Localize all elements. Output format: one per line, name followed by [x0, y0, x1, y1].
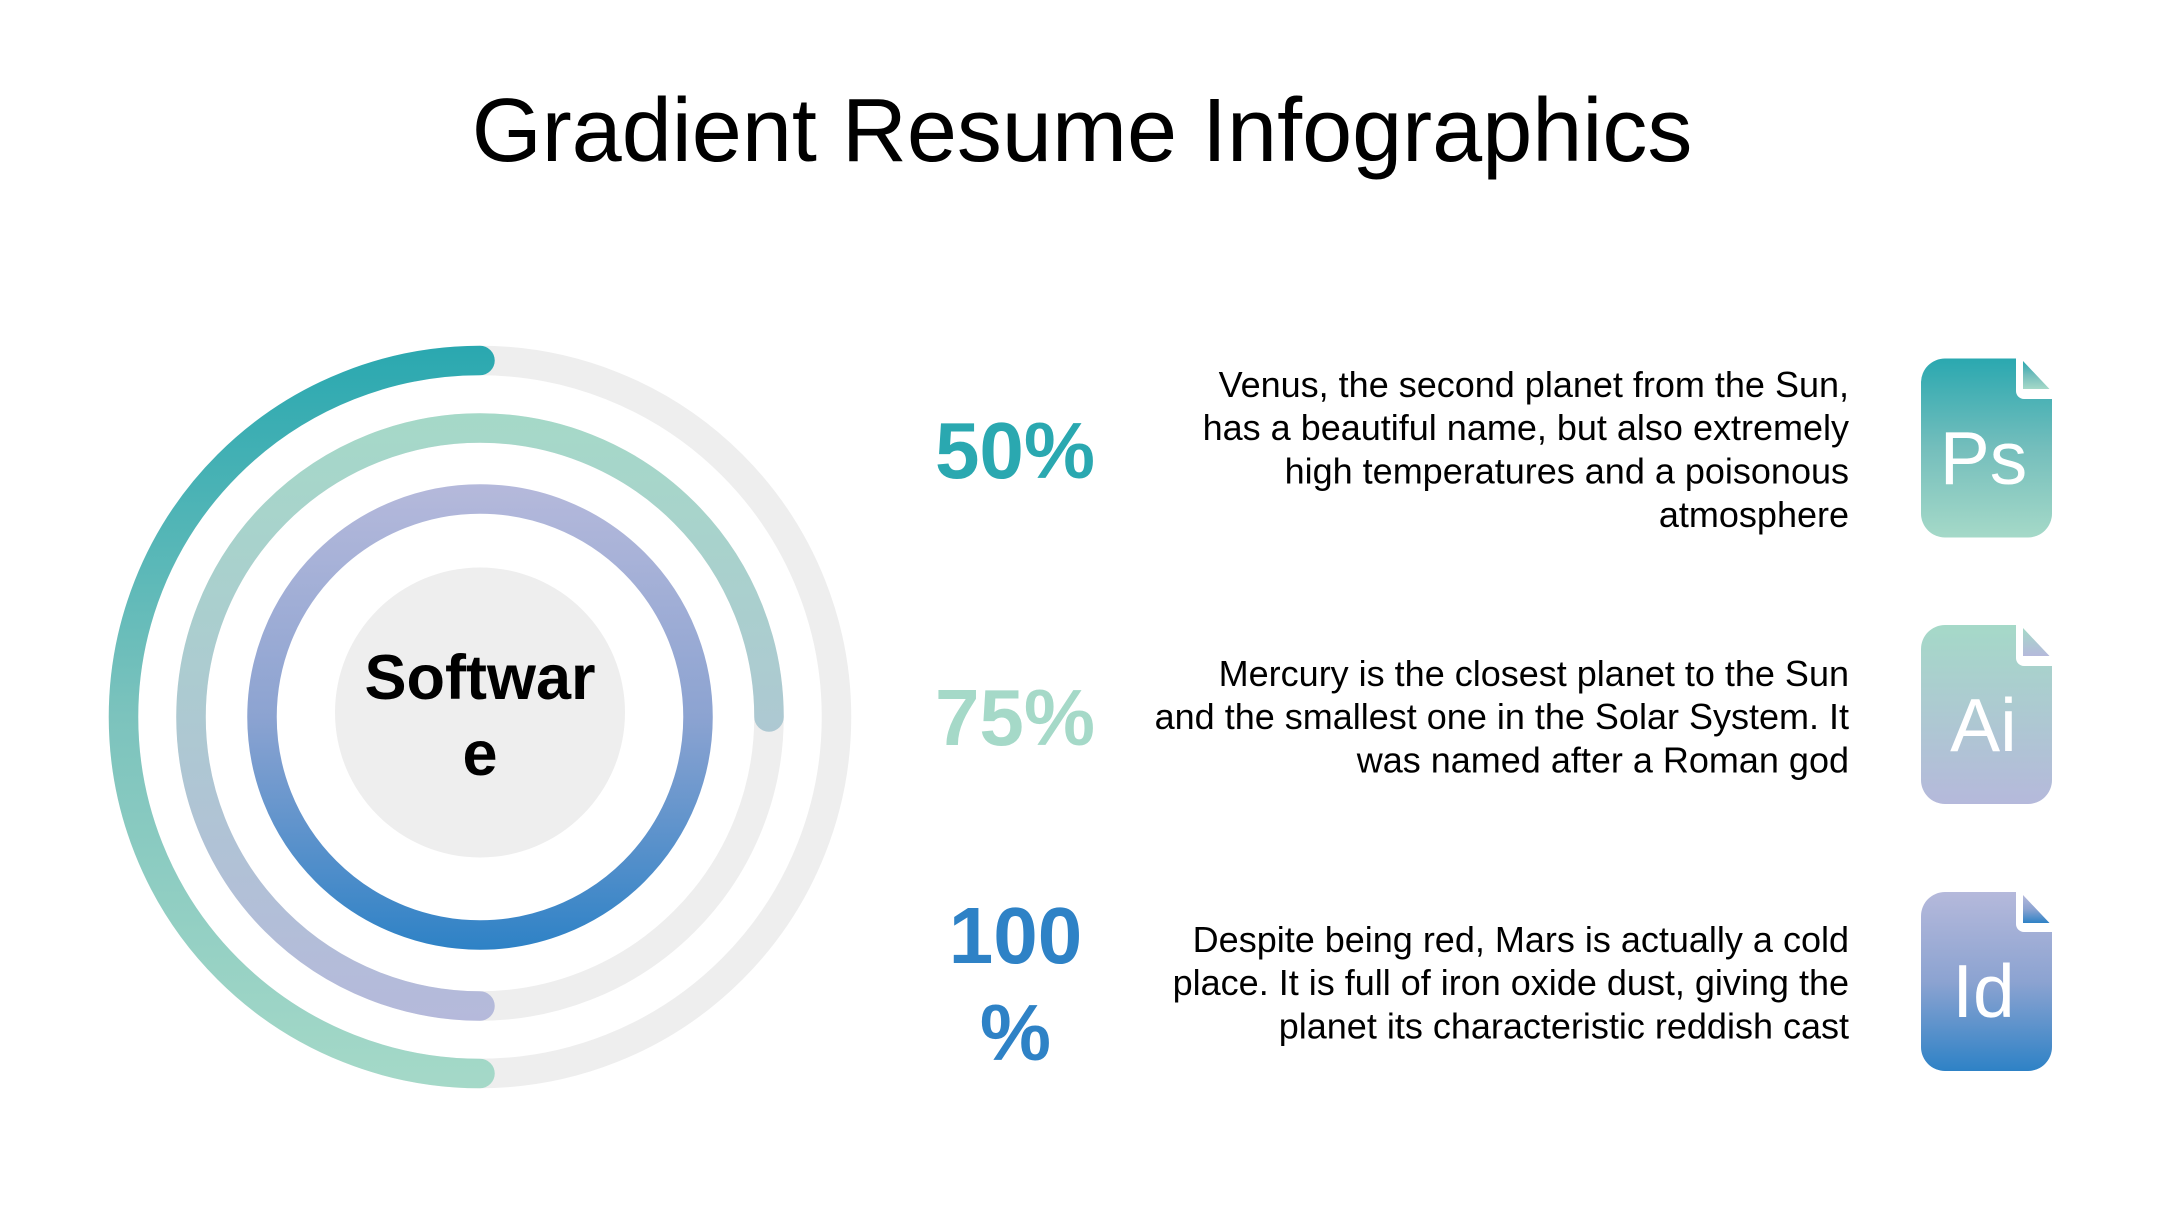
row: Photoshop [935, 352, 2058, 538]
icon: Ai file: Ai [1950, 683, 2017, 767]
description: Mercury: was named after a Roman god [1356, 740, 1849, 780]
row: InDesign [949, 886, 2058, 1077]
percentage: 75%: 75% [935, 673, 1095, 762]
ring track: outer [124, 360, 836, 1074]
description: Venus: has a beautiful name, but also extremely [1203, 407, 1849, 448]
ring arc: outer 50% [123, 360, 480, 1074]
percentage: 100%: 100 [949, 891, 1082, 980]
icon: Id file [1921, 886, 2058, 1071]
icon: Ai file [1921, 619, 2058, 804]
row: Illustrator [935, 619, 2058, 804]
description: Mercury: and the smallest one in the Solar System. It [1155, 696, 1849, 737]
ring track: middle [191, 428, 769, 1006]
description: Mars: place. It is full of iron oxide dust, giving the [1173, 962, 1849, 1003]
description: Mercury: Mercury is the closest planet to the Sun [1219, 653, 1849, 694]
description: Venus: high temperatures and a poisonous [1285, 450, 1849, 492]
description: Venus: Venus, the second planet from the Sun, [1219, 364, 1849, 405]
center label: Softwar [364, 643, 596, 713]
center circle [335, 568, 625, 858]
ring arc: inner 100% [262, 499, 698, 935]
center label: e [462, 719, 498, 789]
description: Mars: Despite being red, Mars is actually a cold [1193, 919, 1849, 960]
chart: concentric progress rings [123, 360, 836, 1074]
percentage: 100%: % [980, 988, 1051, 1077]
description: Mars: planet its characteristic reddish cast [1279, 1006, 1849, 1046]
title: Gradient Resume Infographics [472, 81, 1692, 181]
ring arc: middle 75% [191, 428, 769, 1006]
icon: Ps file [1921, 352, 2058, 538]
icon: Id file: Id [1952, 949, 2015, 1033]
description: Venus: atmosphere [1659, 494, 1849, 535]
icon: Ps file: Ps [1940, 416, 2027, 500]
percentage: 50%: 50% [935, 406, 1095, 495]
